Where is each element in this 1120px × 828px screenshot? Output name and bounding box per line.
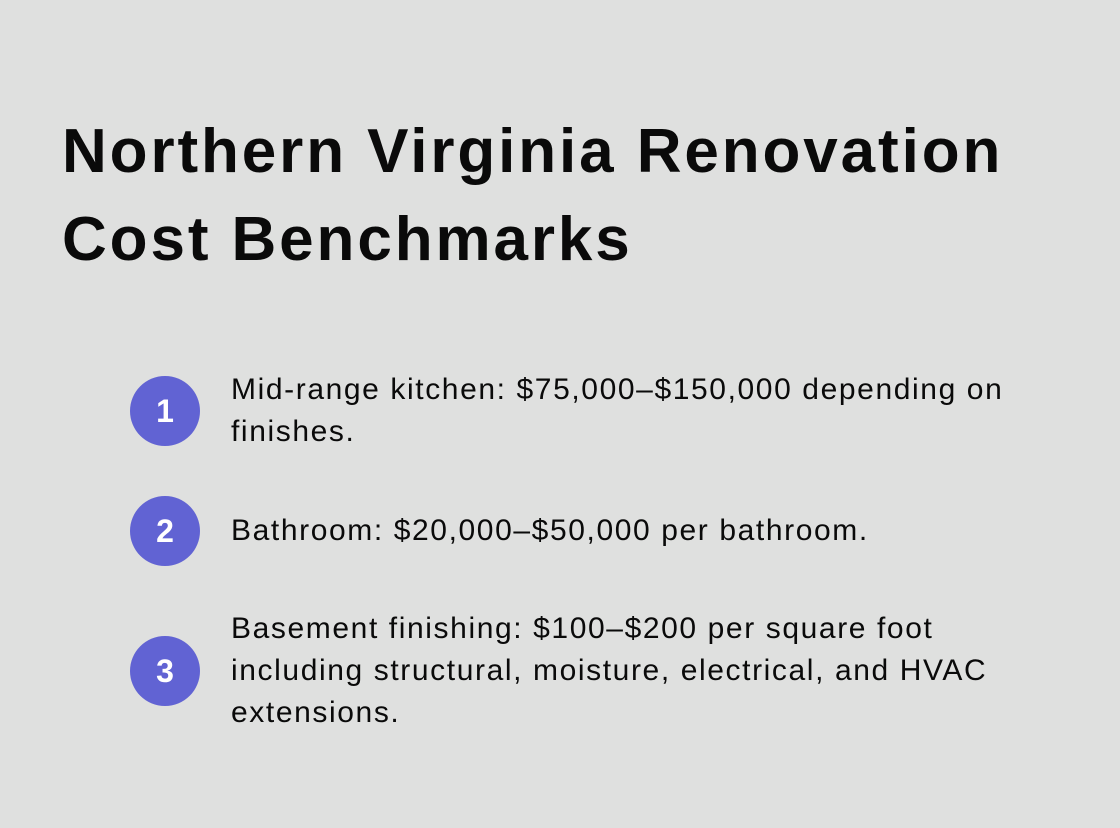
icon: number 2 [130, 496, 200, 566]
item 1 [130, 373, 1003, 448]
item 2 [130, 496, 869, 566]
icon: number 2: 2 [156, 513, 174, 549]
text 2: Bathroom: $20,000–$50,000 per bathroom. [231, 514, 869, 547]
item 3 [130, 612, 987, 729]
text 3: Basement finishing: $100–$200 per square foot including structural, moisture, electrical, and HVAC extensions. [231, 612, 987, 729]
icon: number 3 [130, 636, 200, 706]
icon: number 1: 1 [156, 393, 174, 429]
icon: number 1 [130, 376, 200, 446]
icon: number 3: 3 [156, 653, 174, 689]
title: Northern Virginia Renovation [62, 117, 1003, 186]
text 1: Mid-range kitchen: $75,000–$150,000 depending on finishes. [231, 373, 1003, 448]
title [62, 117, 1003, 274]
title: Cost Benchmarks [62, 205, 633, 274]
